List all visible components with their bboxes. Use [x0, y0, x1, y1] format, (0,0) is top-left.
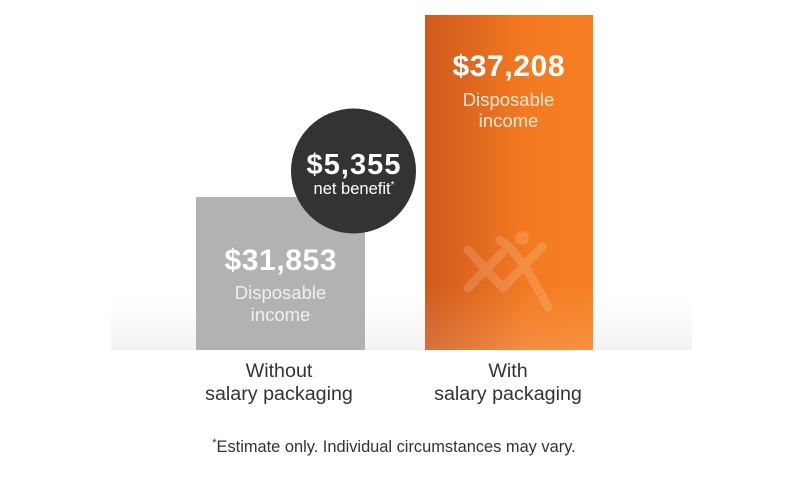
label: disposable income, with: income [479, 110, 538, 131]
amount: net benefit: $5,355 [306, 149, 400, 181]
label: disposable income, without: income [251, 304, 310, 325]
label: net benefit: * [391, 180, 395, 191]
axis label: with salary packaging: salary packaging [434, 383, 582, 405]
icon: watermark logo [468, 231, 548, 307]
amount: with salary packaging: $37,208 [452, 50, 564, 83]
bar: without salary packaging [196, 197, 365, 350]
label: disposable income, without: Disposable [235, 282, 326, 303]
axis label: without salary packaging: Without [246, 360, 313, 382]
floor shadow [111, 298, 692, 350]
footnote: Estimate only. Individual circumstances may vary. [217, 438, 576, 456]
amount: without salary packaging: $31,853 [224, 244, 336, 277]
axis label: without salary packaging: salary packaging [205, 383, 353, 405]
label: net benefit: net benefit [314, 180, 391, 198]
callout: net benefit [291, 108, 416, 234]
footnote: * [212, 437, 217, 449]
label: disposable income, with: Disposable [463, 89, 554, 110]
bar: with salary packaging [425, 15, 593, 350]
axis label: with salary packaging: With [488, 360, 528, 382]
